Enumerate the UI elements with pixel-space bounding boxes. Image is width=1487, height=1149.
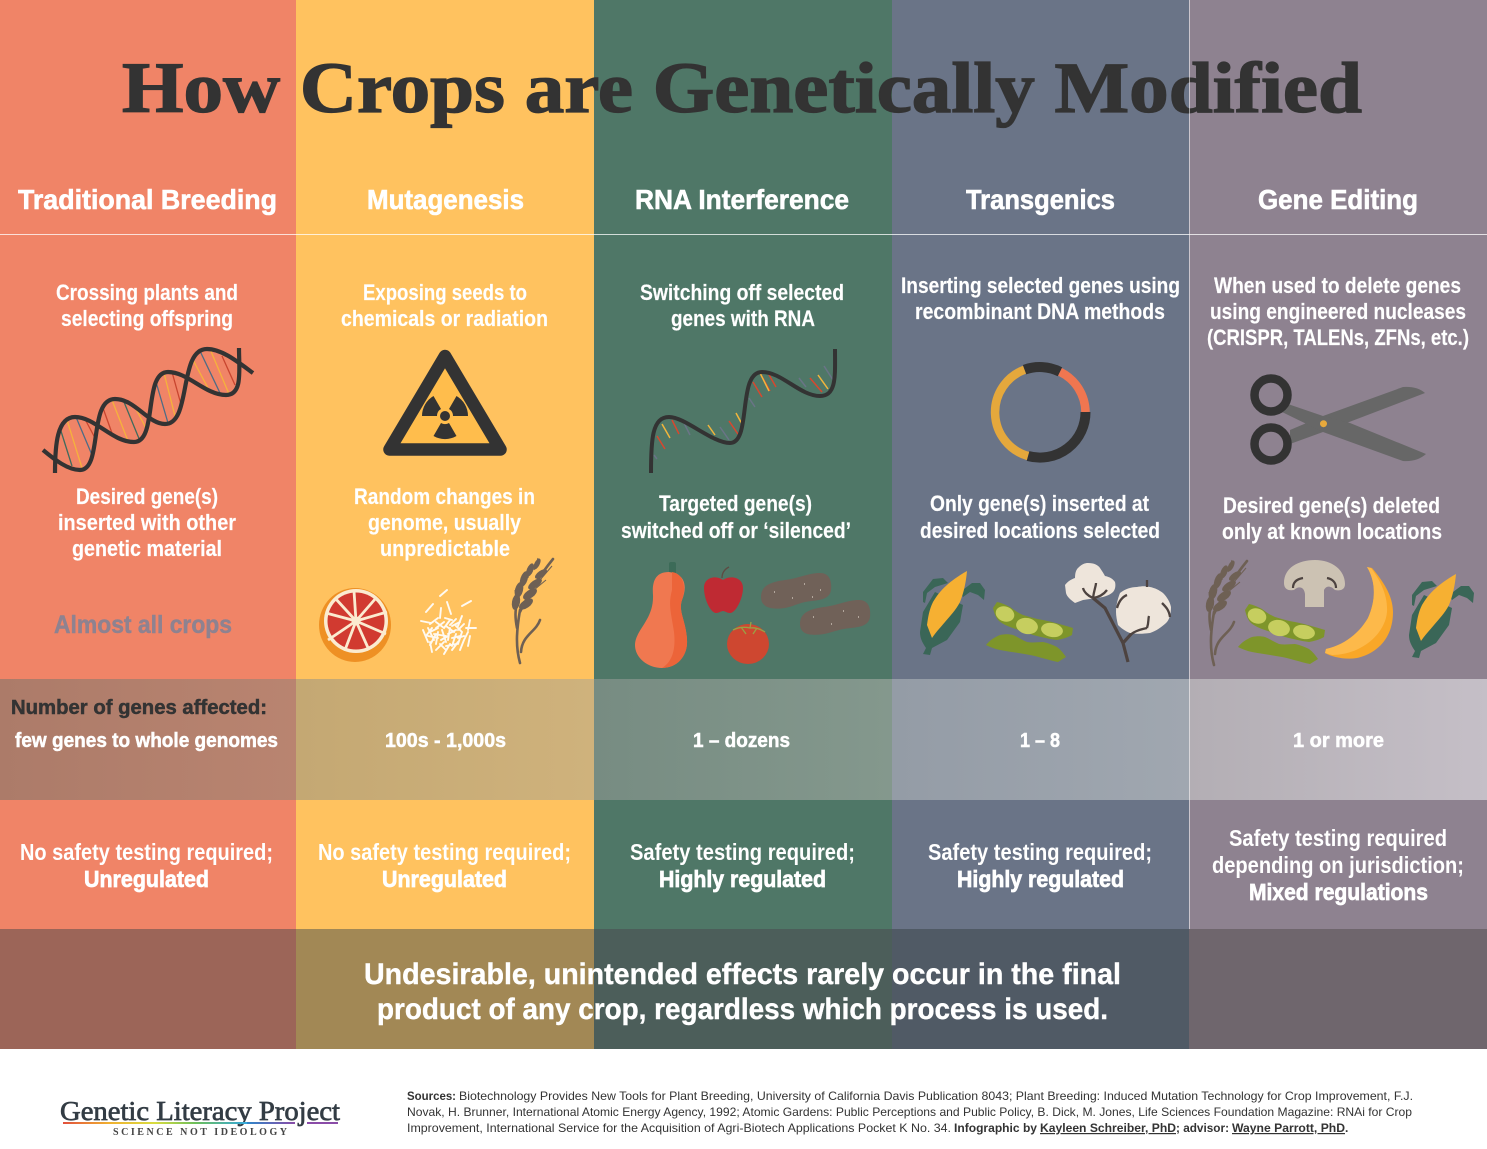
result: transgenics: desired locations selected (920, 518, 1160, 543)
column headings (18, 184, 1418, 215)
row: regulation: No safety testing required; (20, 839, 273, 865)
icon: radiation warning triangle (390, 356, 500, 450)
description: gene editing (1207, 273, 1469, 350)
icon: apple (704, 567, 743, 613)
label: almost all crops: Almost all crops (54, 611, 232, 639)
band: conclusion (0, 929, 1487, 1049)
row: regulation (20, 825, 1464, 905)
result: gene editing: only at known locations (1222, 519, 1442, 544)
result: traditional breeding: inserted with other (58, 510, 236, 535)
result: traditional breeding: genetic material (72, 536, 222, 561)
result: RNA interference (621, 491, 851, 543)
icon: corn (1409, 574, 1474, 658)
icon: cotton (1065, 563, 1171, 662)
result: gene editing (1222, 493, 1442, 544)
sources: Biotechnology Provides New Tools for Plant Breeding, University of California Davis Publication 8043; Plant Breeding: Induced Mutation Technology for Crop Improvement, F.J. (459, 1089, 1413, 1103)
icon: wheat (511, 557, 553, 663)
result: traditional breeding: Desired gene(s) (76, 484, 218, 509)
band: number of genes affected (0, 679, 1487, 800)
sources (407, 1089, 1413, 1135)
icon: grapefruit (319, 588, 391, 662)
icon: potatoes (761, 573, 870, 635)
result: traditional breeding (58, 484, 236, 561)
result: transgenics: Only gene(s) inserted at (930, 491, 1150, 516)
logo: Genetic Literacy Project (60, 1096, 341, 1138)
description: RNA interference: Switching off selected (640, 280, 844, 305)
result: transgenics (920, 491, 1160, 543)
row: regulation: Safety testing required (1229, 825, 1447, 851)
description: mutagenesis: Exposing seeds to (363, 280, 527, 305)
row: regulation: Unregulated (84, 866, 209, 892)
description: mutagenesis (341, 280, 548, 331)
sources: Improvement, International Service for the Acquisition of Agri-Biotech Applications Pocket K No. 34. (407, 1121, 951, 1135)
result: mutagenesis (354, 484, 535, 561)
icon: rice grains (421, 590, 476, 654)
values: genes affected: 1 – dozens (693, 730, 790, 752)
sources: Sources: (407, 1089, 456, 1103)
title: How Crops are Genetically Modified (122, 48, 1362, 128)
icon: mushroom (1284, 560, 1345, 607)
description: transgenics (901, 273, 1180, 324)
row: regulation: Safety testing required; (928, 839, 1152, 865)
logo: Genetic Literacy Project: SCIENCE NOT IDEOLOGY (113, 1127, 288, 1138)
panel: transgenics (901, 273, 1180, 662)
icon: RNA strand (651, 349, 835, 473)
panel: mutagenesis (319, 280, 553, 663)
icon: wheat (1205, 559, 1247, 665)
values: genes affected: 1 – 8 (1020, 730, 1060, 752)
values: genes affected: 100s - 1,000s (385, 730, 506, 752)
row: regulation: No safety testing required; (318, 839, 571, 865)
row: regulation: Safety testing required; (630, 839, 855, 865)
row: regulation: Unregulated (382, 866, 507, 892)
sources: Infographic by (954, 1121, 1037, 1135)
result: mutagenesis: unpredictable (380, 536, 510, 561)
values: genes affected: 1 or more (1293, 730, 1384, 752)
band: conclusion: product of any crop, regardless which process is used. (377, 993, 1108, 1026)
description: RNA interference (640, 280, 844, 331)
result: gene editing: Desired gene(s) deleted (1223, 493, 1440, 518)
panel: gene editing (1205, 273, 1474, 665)
band: conclusion: Undesirable, unintended effects rarely occur in the final (364, 958, 1121, 991)
icon: banana (1325, 567, 1393, 659)
values: genes affected: few genes to whole genomes (15, 730, 278, 752)
result: RNA interference: Targeted gene(s) (659, 491, 812, 516)
column headings: Gene Editing (1258, 184, 1418, 215)
icon: plasmid ring (995, 367, 1086, 458)
sources: . (1345, 1121, 1348, 1135)
icon: squash (635, 562, 687, 668)
description: RNA interference: genes with RNA (671, 306, 815, 331)
sources: Wayne Parrott, PhD (1232, 1121, 1345, 1135)
label: number of genes affected: Number of genes affected: (11, 697, 267, 719)
description: transgenics: recombinant DNA methods (915, 299, 1165, 324)
column headings: RNA Interference (635, 184, 849, 215)
icon: corn (920, 571, 985, 655)
description: traditional breeding: Crossing plants and (56, 280, 238, 305)
result: RNA interference: switched off or ‘silenced’ (621, 518, 851, 543)
icon: scissors (1254, 378, 1426, 461)
icon: edamame (986, 602, 1073, 662)
result: mutagenesis: Random changes in (354, 484, 535, 509)
description: traditional breeding (56, 280, 238, 331)
description: transgenics: Inserting selected genes using (901, 273, 1180, 298)
icon: edamame (1238, 604, 1325, 664)
sources: ; advisor: (1176, 1121, 1229, 1135)
icon: tomato (727, 622, 769, 664)
panel: RNA interference (621, 280, 870, 668)
description: traditional breeding: selecting offspring (61, 306, 233, 331)
row: regulation: Mixed regulations (1249, 879, 1428, 905)
result: mutagenesis: genome, usually (368, 510, 522, 535)
panel: traditional breeding (43, 280, 253, 639)
sources: Novak, H. Brunner, International Atomic Energy Agency, 1992; Atomic Gardens: Public Perceptions and Public Policy, B. Dick, M. Jones, Life Sciences Foundation Magazine: RNAi for Crop (407, 1105, 1412, 1119)
icon: DNA double helix (43, 348, 253, 473)
column headings: Traditional Breeding (18, 184, 277, 215)
logo: Genetic Literacy Project: Genetic Literacy Project (60, 1096, 341, 1126)
row: regulation: Highly regulated (659, 866, 826, 892)
row: regulation: Highly regulated (957, 866, 1124, 892)
column headings: Mutagenesis (367, 184, 524, 215)
description: mutagenesis: chemicals or radiation (341, 306, 548, 331)
sources: Kayleen Schreiber, PhD (1040, 1121, 1176, 1135)
column headings: Transgenics (966, 184, 1115, 215)
values: genes affected (15, 730, 1384, 752)
